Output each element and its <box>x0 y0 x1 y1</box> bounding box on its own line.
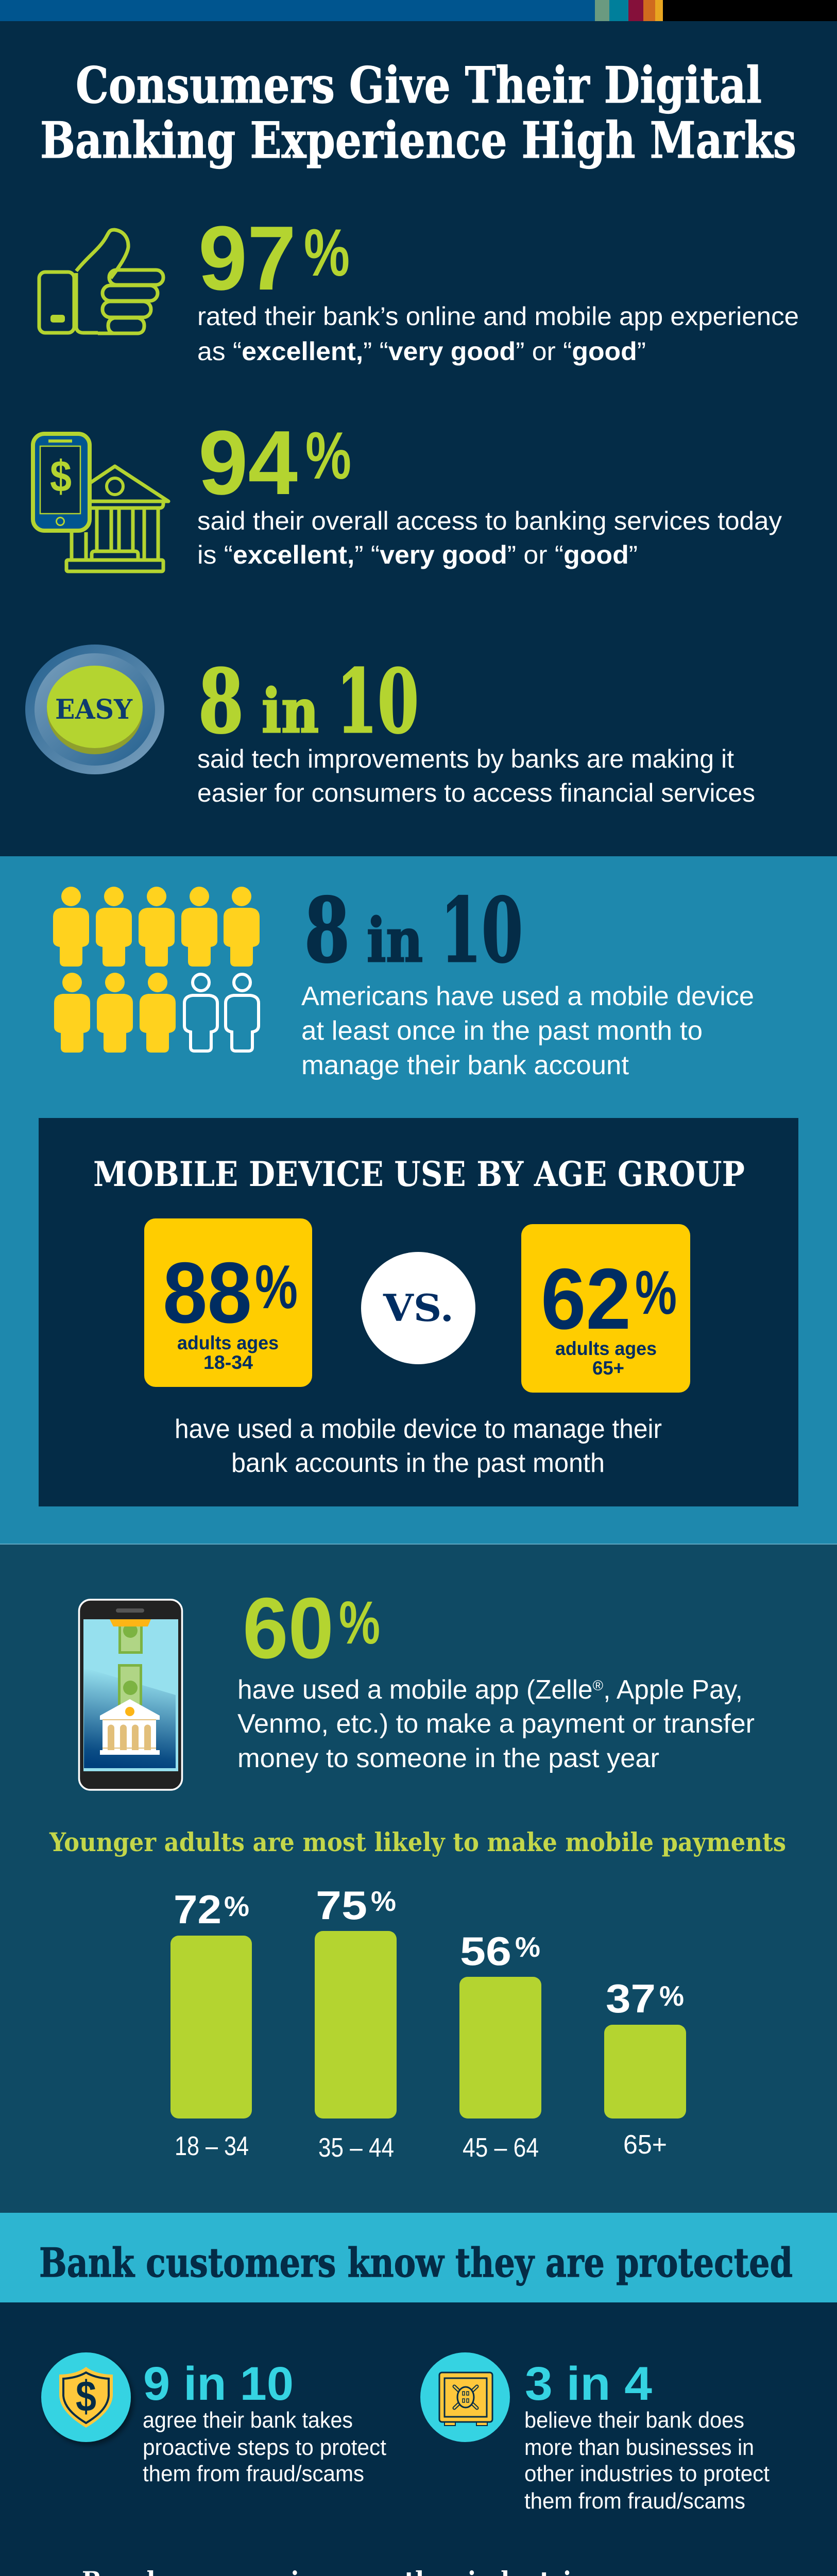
stat: 8 in 10 easier: 8 <box>198 650 244 753</box>
stat: 3 in 4: more than businesses in <box>524 2435 754 2460</box>
stat: 97 percent: % <box>304 215 350 290</box>
stat: 97 percent: 97 <box>198 207 296 309</box>
stat: 97 percent <box>197 207 799 366</box>
caption: bank accounts in the past month <box>231 1448 605 1478</box>
bar: 65+: % <box>659 1980 684 2012</box>
stat: 3 in 4: believe their bank does <box>524 2408 744 2433</box>
stat: 8 in 10 Americans <box>301 878 754 1080</box>
bar: 65+: 65+ <box>623 2130 667 2160</box>
bar: 18-34 <box>170 1887 252 2161</box>
stat: 8 in 10 easier: easier for consumers to access financial services <box>197 778 755 807</box>
stat: 8 in 10 Americans: 8 <box>304 878 350 982</box>
panel: mobile payments <box>0 1544 837 2213</box>
bar: 35-44: % <box>371 1885 396 1917</box>
icon: ten people, eight filled <box>53 887 260 1053</box>
versus circle: VS. <box>383 1286 454 1330</box>
bar: 18-34: 18 – 34 <box>175 2131 249 2161</box>
panel: mobile device use <box>0 856 837 1544</box>
stat: 60 percent: money to someone in the past year <box>237 1743 659 1773</box>
top colour bar <box>0 0 837 21</box>
stat: 60 percent: , Apple Pay, <box>603 1675 743 1705</box>
bar: 45-64: % <box>515 1931 540 1963</box>
stat: 8 in 10 Americans: Americans have used a mobile device <box>301 981 754 1011</box>
card: ages 18-34: adults ages <box>177 1332 279 1353</box>
banner: bank customers protected <box>0 2213 837 2302</box>
icon: phone and bank <box>33 434 168 571</box>
icon: easy button: EASY <box>55 694 133 725</box>
card: ages 18-34: % <box>255 1252 298 1321</box>
stat: 8 in 10 easier: 10 <box>336 650 419 753</box>
bar: 45-64: 45 – 64 <box>463 2133 539 2163</box>
stat: 9 in 10 <box>143 2358 386 2486</box>
bar: 65+: 37 <box>606 1976 656 2021</box>
icon: phone and bank: $ <box>50 452 72 501</box>
stat: 3 in 4: them from fraud/scams <box>524 2488 745 2514</box>
stat: 97 percent: as “excellent,” “very good” or “good” <box>197 337 646 366</box>
bar: 65+ <box>604 1976 686 2160</box>
stat: 9 in 10: them from fraud/scams <box>143 2461 364 2486</box>
card: ages 65+: 65+ <box>592 1358 624 1379</box>
icon: easy button <box>25 645 164 774</box>
bar: 45-64: 56 <box>460 1928 511 1974</box>
stat: 60 percent: Venmo, etc.) to make a payment or transfer <box>237 1709 755 1739</box>
bar: 35-44: 35 – 44 <box>318 2133 394 2163</box>
stat: 9 in 10: proactive steps to protect <box>143 2435 386 2460</box>
card: ages 18-34: 18-34 <box>203 1352 253 1373</box>
stat: 8 in 10 easier: in <box>262 675 319 747</box>
stat: 60 percent: have used a mobile app (Zelle <box>237 1675 596 1705</box>
versus circle <box>361 1252 475 1364</box>
stat: 8 in 10 Americans: manage their bank account <box>301 1050 629 1080</box>
stat: 60 percent: % <box>339 1589 380 1657</box>
stat: 94 percent: % <box>305 418 351 493</box>
caption <box>175 1414 662 1478</box>
bar: 18-34: 72 <box>174 1887 221 1932</box>
stat: 3 in 4: 3 in 4 <box>525 2358 652 2410</box>
icon: thumbs up with phone <box>39 230 163 333</box>
panel: protection and trust <box>0 2302 837 2576</box>
stat: 8 in 10 Americans: 10 <box>440 878 523 982</box>
panel: mobile device use by age group <box>39 1118 798 1506</box>
card: ages 65+: % <box>635 1258 677 1327</box>
heading: MOBILE DEVICE USE BY AGE GROUP <box>93 1154 745 1194</box>
stat: 94 percent: said their overall access to banking services today <box>197 506 782 535</box>
title <box>40 56 796 170</box>
stat: 94 percent <box>197 412 782 569</box>
bar: 45-64 <box>459 1928 541 2163</box>
icon: shield: $ <box>76 2372 96 2420</box>
stat: 94 percent: 94 <box>198 412 298 514</box>
icon: shield <box>41 2352 131 2442</box>
stat: 9 in 10: 9 in 10 <box>143 2358 294 2410</box>
stat: 97 percent: rated their bank’s online and mobile app experience <box>197 302 799 331</box>
stat: 60 percent: 60 <box>243 1580 334 1676</box>
icon: safe <box>420 2352 510 2442</box>
card: ages 65+: adults ages <box>555 1338 657 1359</box>
stat: 3 in 4 <box>524 2358 770 2514</box>
stat: 8 in 10 easier: said tech improvements by banks are making it <box>197 744 734 773</box>
stat: 60 percent <box>237 1580 755 1773</box>
stat: 8 in 10 Americans: in <box>367 905 423 976</box>
card: ages 18-34 <box>144 1218 312 1387</box>
icon: phone paying bank <box>79 1600 182 1790</box>
stat: 8 in 10 easier <box>197 650 755 807</box>
panel: digital banking experience <box>0 21 837 856</box>
card: ages 18-34: 88 <box>163 1244 252 1341</box>
bar: 35-44: 75 <box>316 1883 367 1928</box>
card: ages 65+ <box>521 1224 690 1393</box>
stat: 9 in 10: agree their bank takes <box>143 2408 353 2433</box>
stat: 8 in 10 Americans: at least once in the past month to <box>301 1016 703 1046</box>
stat: 60 percent: ® <box>593 1677 603 1693</box>
card: ages 65+: 62 <box>541 1250 631 1347</box>
bar: 35-44 <box>315 1883 397 2163</box>
bar: 18-34: % <box>224 1890 249 1922</box>
bar chart: payments by age <box>170 1883 686 2163</box>
caption: have used a mobile device to manage their <box>175 1414 662 1444</box>
stat: 3 in 4: other industries to protect <box>524 2461 770 2486</box>
stat: 94 percent: is “excellent,” “very good” or “good” <box>197 540 638 569</box>
